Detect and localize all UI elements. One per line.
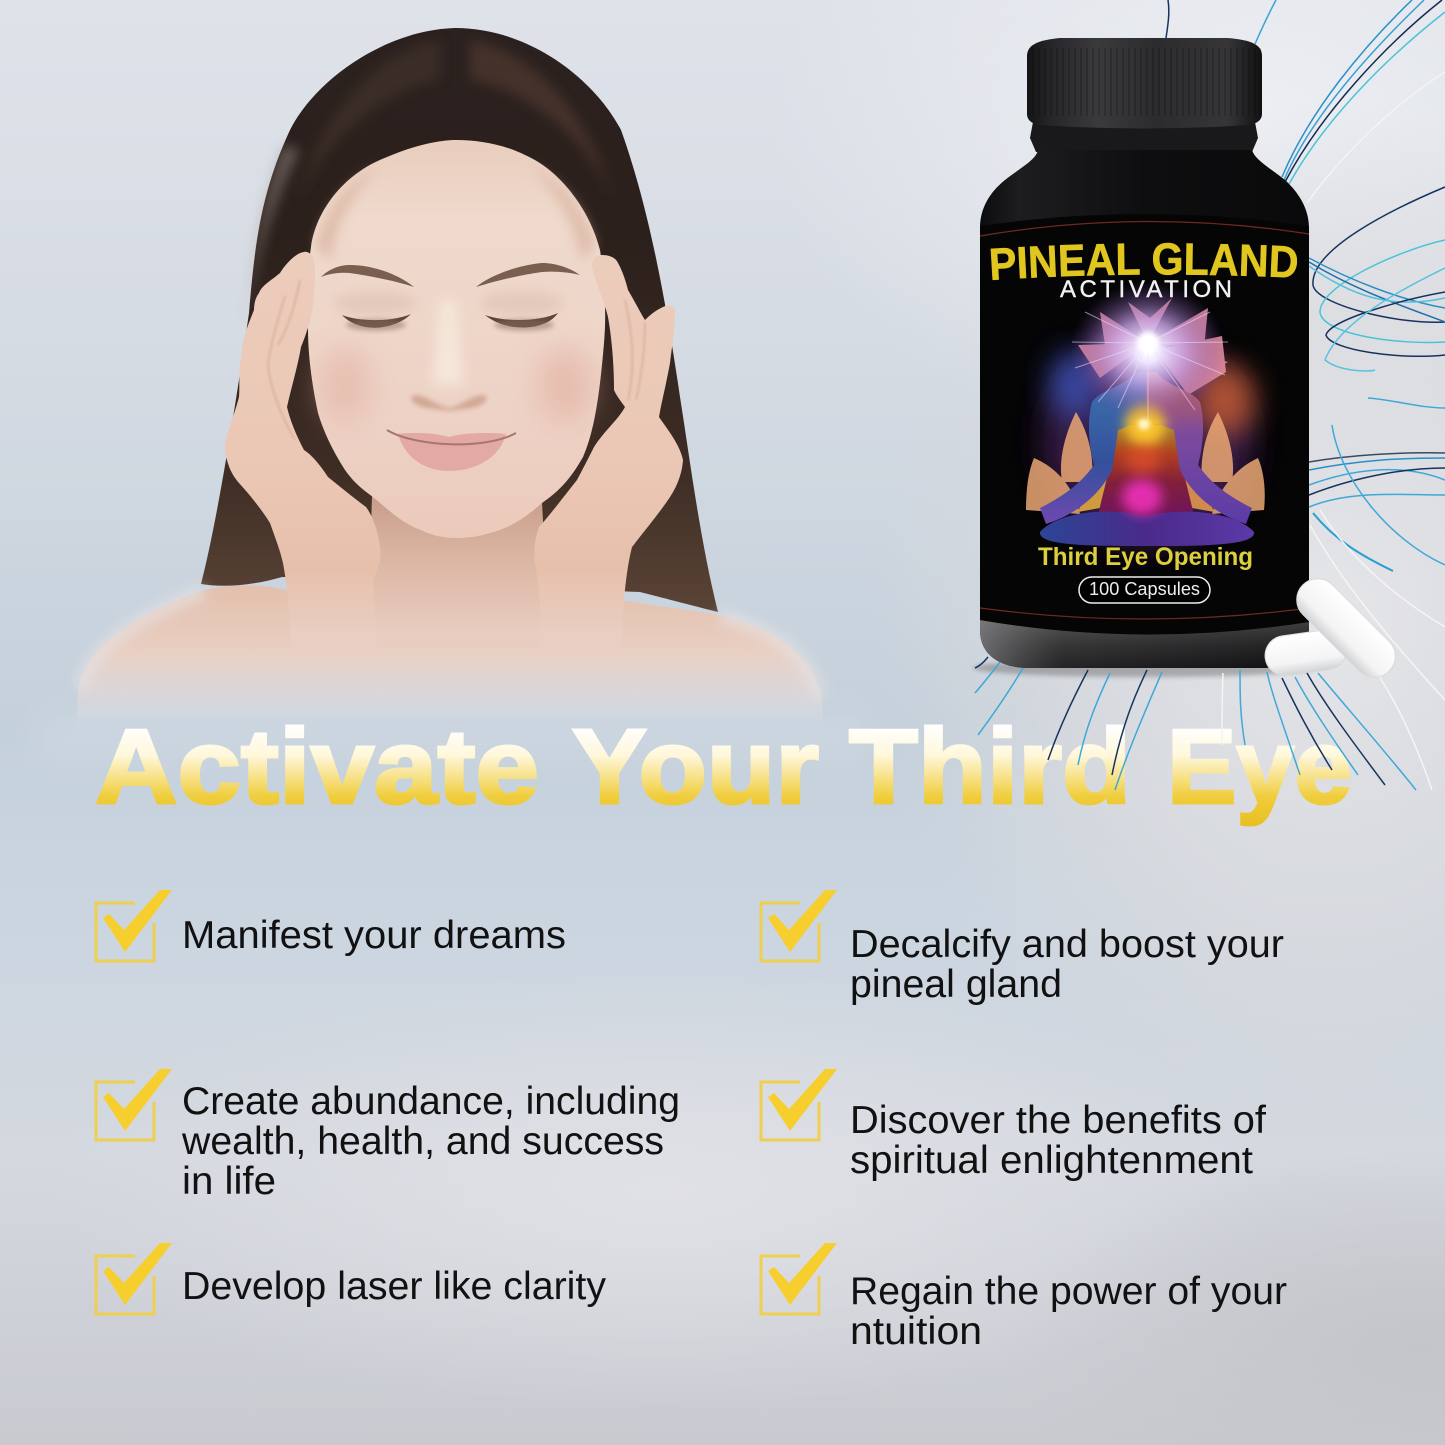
benefit: intuition xyxy=(761,1243,1287,1353)
right side of figure xyxy=(1146,372,1252,524)
benefit: clarity: Develop laser like clarity xyxy=(182,1265,606,1308)
woman portrait xyxy=(40,28,870,762)
eye socket shade xyxy=(333,291,417,315)
benefit: decalcify xyxy=(761,890,1284,1006)
title: Activate xyxy=(95,708,539,826)
label tagline: Third Eye Opening xyxy=(1038,543,1253,571)
capsule count badge xyxy=(1079,577,1210,603)
screw cap xyxy=(1027,38,1262,128)
hair xyxy=(201,28,718,612)
chakra glows xyxy=(1125,403,1165,447)
benefit: enlightenment: spiritual enlightenment xyxy=(850,1139,1253,1182)
nose bridge highlight xyxy=(432,300,464,385)
benefit: manifest xyxy=(96,890,566,961)
shoulder edge softening xyxy=(80,592,820,700)
crossed legs xyxy=(1040,512,1254,546)
benefit: abundance: in life xyxy=(182,1160,276,1203)
check icon xyxy=(96,1243,172,1314)
product bottle xyxy=(972,38,1310,680)
benefit: abundance: wealth, health, and success xyxy=(181,1120,664,1163)
energy lines behind the bottle xyxy=(1166,0,1445,790)
benefit: manifest: Manifest your dreams xyxy=(182,914,566,957)
benefit: decalcify: Decalcify and boost your xyxy=(850,923,1284,966)
top petals xyxy=(1078,298,1228,395)
benefit: intuition: Regain the power of your xyxy=(850,1270,1287,1313)
label heading: PINEAL GLAND xyxy=(990,242,1298,280)
torso xyxy=(1097,425,1195,522)
energy lines below the bottle xyxy=(975,657,1416,790)
neck xyxy=(1030,122,1258,152)
check icon xyxy=(96,1069,172,1140)
shoulder and body xyxy=(980,150,1309,668)
check icon xyxy=(761,1243,837,1314)
benefit: enlightenment: Discover the benefits of xyxy=(850,1099,1266,1142)
benefit: intuition: ntuition xyxy=(850,1310,982,1353)
arm gap wedges xyxy=(1078,468,1112,512)
right hand detail xyxy=(625,300,645,400)
lips xyxy=(387,430,516,471)
capsule count badge: 100 Capsules xyxy=(1089,579,1200,599)
hair sheen on left edge xyxy=(243,145,300,330)
benefit: abundance xyxy=(96,1069,680,1203)
left side of figure xyxy=(1040,372,1146,524)
left hand xyxy=(225,252,381,650)
eyebrows xyxy=(321,265,414,287)
cheek blush xyxy=(319,347,371,423)
right hand xyxy=(534,255,683,650)
neck xyxy=(310,496,590,640)
side petals xyxy=(1026,412,1265,514)
title: Eye xyxy=(1167,708,1352,826)
forehead and temple shading xyxy=(316,165,380,262)
benefit: decalcify: pineal gland xyxy=(850,963,1062,1006)
benefit: abundance: Create abundance, including xyxy=(182,1080,680,1123)
title xyxy=(95,708,1352,826)
chakra artwork xyxy=(1026,282,1265,546)
hair warm strands xyxy=(470,40,612,200)
check icon xyxy=(96,890,172,961)
check icon xyxy=(761,1069,837,1140)
radiant star xyxy=(1070,282,1226,422)
benefit: enlightenment xyxy=(761,1069,1266,1182)
face xyxy=(307,140,605,538)
nose xyxy=(411,395,487,411)
fade into background xyxy=(40,712,870,762)
bottle base xyxy=(980,620,1309,668)
title: Your xyxy=(572,708,819,826)
bottle shadow xyxy=(973,659,1317,677)
eyes closed xyxy=(342,313,558,331)
label subheading: ACTIVATION xyxy=(1060,276,1232,303)
check icon xyxy=(761,890,837,961)
left hand detail xyxy=(268,280,300,440)
capsules xyxy=(1262,570,1404,686)
label xyxy=(980,214,1309,635)
title: Third xyxy=(849,708,1131,826)
shoulders and chest xyxy=(75,585,825,760)
benefit: clarity xyxy=(96,1243,606,1314)
